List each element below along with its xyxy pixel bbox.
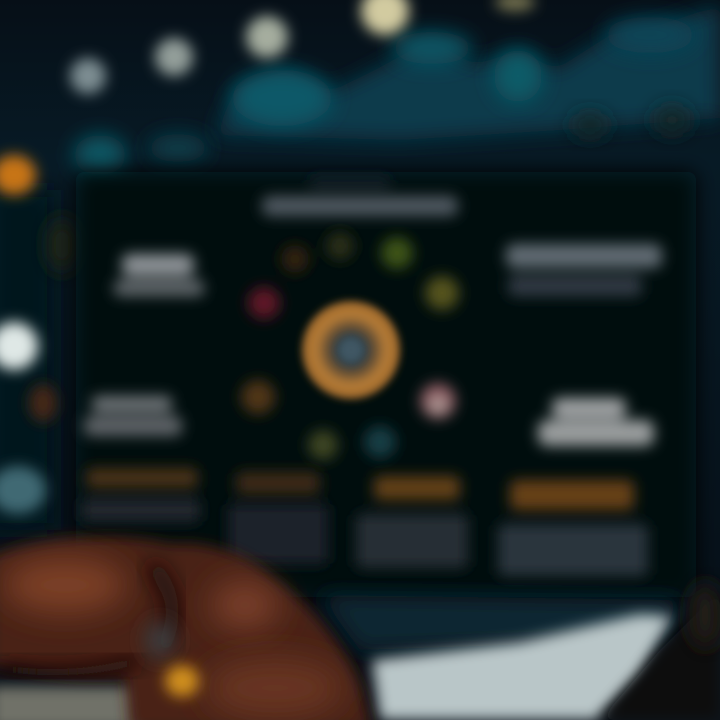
text block: mid right: [538, 398, 654, 446]
finger shadow 2: [0, 660, 140, 672]
yellow fingernail: [165, 665, 199, 697]
highlight knuckle right: [211, 581, 279, 629]
card 3: [356, 476, 468, 568]
blurred text blocks: [84, 244, 662, 446]
left edge screen items: [0, 155, 76, 530]
lower hand tone: [205, 658, 345, 718]
palm and fingers: [0, 537, 372, 720]
card 4: [498, 480, 648, 576]
blurred title: [262, 178, 458, 216]
teal gray block: [0, 466, 46, 514]
dashboard panel: [76, 172, 696, 597]
finger shadow: [150, 565, 172, 650]
central ring: [302, 301, 400, 399]
white keyboard surface: [372, 614, 672, 720]
gray gap between fingers: [146, 622, 174, 658]
lower white sleeve strip: [0, 686, 140, 720]
text block: top left: [114, 254, 204, 296]
hand: [0, 537, 372, 720]
bokeh lights: [70, 0, 535, 94]
card 2: [228, 472, 328, 564]
white blob: [0, 322, 38, 370]
teal mountain chart: [74, 5, 720, 175]
olive dot: [48, 217, 76, 273]
card 1: [82, 468, 200, 522]
highlight knuckle left: [3, 557, 127, 613]
text block: top right: [506, 244, 662, 296]
brown dot: [29, 384, 57, 422]
dark bottom right corner: [600, 581, 720, 720]
left dark column: [0, 190, 54, 530]
teal screen base: [320, 595, 680, 650]
orange tag: [0, 155, 36, 195]
text block: mid left: [84, 396, 182, 436]
surrounding dots: [241, 232, 459, 460]
bottom cards: [82, 468, 648, 576]
